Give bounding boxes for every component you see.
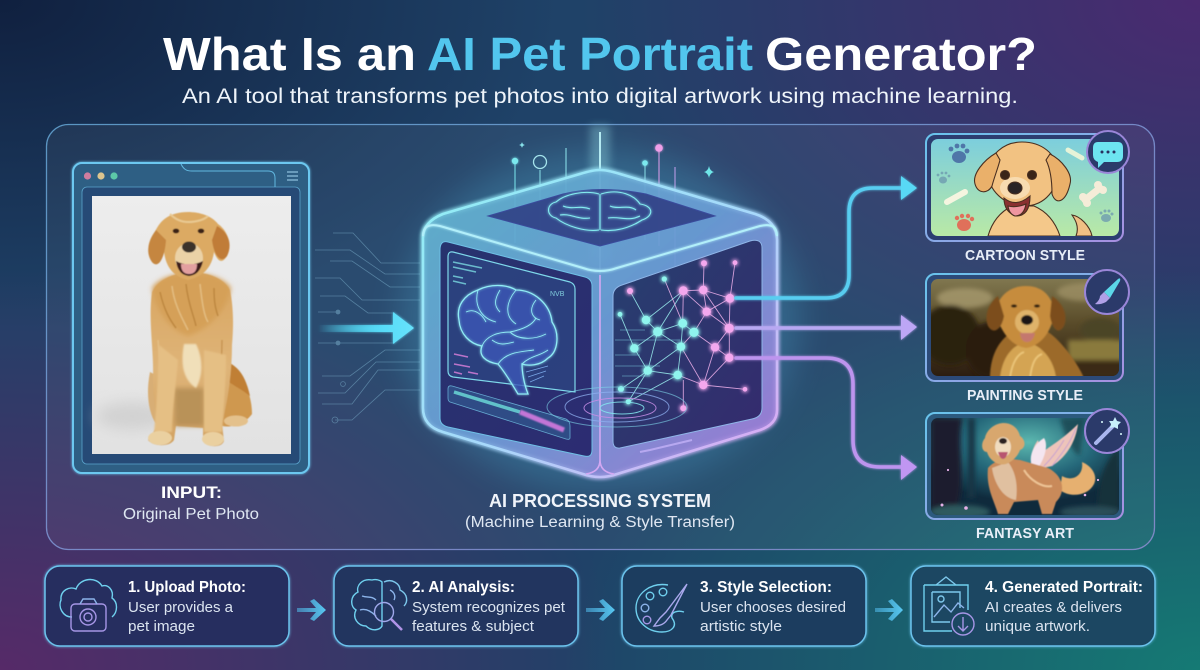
body — [988, 459, 1062, 514]
icon: window dots — [84, 172, 118, 180]
step 2: AI analysis: 2. AI Analysis: — [412, 579, 515, 596]
painted dog — [986, 286, 1084, 378]
icon: AI processing cube — [400, 125, 800, 490]
label: AI processing system: (Machine Learning & Style Transfer) — [465, 514, 735, 531]
icon badge: magic wand — [1085, 409, 1129, 453]
original dog photo — [92, 196, 291, 454]
step 3: style selection — [622, 566, 866, 646]
top face with brain — [488, 190, 715, 246]
step 4: generated portrait — [911, 566, 1155, 646]
step 2: AI analysis — [334, 566, 578, 646]
label: painting style: PAINTING STYLE — [967, 388, 1083, 404]
label: input — [123, 483, 259, 523]
subtitle: An AI tool that transforms pet photos into digital artwork using machine learning. — [182, 85, 1018, 108]
step 1: upload photo — [45, 566, 289, 646]
tail — [1060, 462, 1095, 495]
step 3: style selection: User chooses desired — [700, 600, 846, 616]
brain side view — [458, 286, 557, 394]
card: painting style — [920, 274, 1123, 381]
icon: cloud camera — [60, 580, 116, 631]
front legs — [154, 345, 178, 432]
title: AI Pet Portrait — [427, 28, 753, 80]
step 4: generated portrait: AI creates & delivers — [985, 600, 1122, 616]
step 1: upload photo: 1. Upload Photo: — [128, 579, 246, 596]
step 1: upload photo: pet image — [128, 619, 195, 635]
arrow: to cartoon style — [736, 176, 917, 298]
label: AI processing system: AI PROCESSING SYSTEM — [489, 491, 711, 511]
neural network — [615, 260, 747, 411]
icon: framed picture with download — [924, 577, 974, 635]
circuit lines — [315, 233, 420, 423]
chest ruff — [152, 273, 231, 336]
icon: palette and brush — [636, 584, 687, 632]
step 3: style selection: 3. Style Selection: — [700, 579, 832, 596]
step 4: generated portrait: 4. Generated Portrait: — [985, 579, 1143, 596]
label: input: Original Pet Photo — [123, 506, 259, 523]
title: What Is an — [163, 28, 416, 80]
holographic swirl — [547, 387, 687, 427]
step 4: generated portrait: unique artwork. — [985, 619, 1090, 635]
rear haunch — [205, 362, 252, 426]
progress bar — [448, 386, 570, 439]
fantasy dog with wings — [982, 423, 1095, 514]
icon badge: paint brush — [1085, 270, 1129, 314]
left screen — [440, 242, 592, 456]
top signal lines — [512, 132, 714, 300]
title: Generator? — [765, 28, 1037, 80]
cartoon dog — [975, 142, 1092, 236]
arrow: step 3 to 4 — [875, 599, 903, 621]
icon: brain with magnifier — [352, 580, 407, 630]
card: fantasy art — [926, 413, 1123, 519]
head — [982, 423, 1024, 464]
label: cartoon style: CARTOON STYLE — [965, 248, 1085, 264]
body — [148, 272, 233, 446]
step 2: AI analysis: System recognizes pet — [412, 600, 565, 616]
step 2: AI analysis: features & subject — [412, 619, 534, 635]
wing — [1031, 424, 1078, 470]
left screen: NVB — [550, 291, 565, 298]
arrow: input to AI system — [318, 312, 414, 344]
icon badge: chat bubble — [1087, 131, 1129, 173]
arrow: to fantasy art — [736, 358, 917, 480]
label: fantasy art: FANTASY ART — [976, 526, 1074, 542]
panel: input browser window — [73, 163, 309, 473]
step 3: style selection: artistic style — [700, 619, 782, 635]
arrow: to painting style — [736, 315, 917, 340]
cube body — [423, 170, 777, 477]
step 1: upload photo: User provides a — [128, 600, 234, 616]
label: input: INPUT: — [161, 483, 222, 502]
arrow: step 2 to 3 — [586, 599, 615, 621]
paw prints and bones — [937, 144, 1114, 231]
label: AI processing system — [465, 491, 735, 531]
icon: menu — [287, 172, 298, 180]
card: cartoon style — [926, 134, 1123, 241]
head — [148, 212, 229, 280]
chest highlight — [182, 344, 201, 388]
arrow: step 1 to 2 — [297, 599, 326, 621]
title — [163, 28, 1037, 80]
panel: main workflow — [46, 124, 1154, 550]
right screen — [613, 240, 762, 452]
shaded gap between legs — [174, 388, 204, 426]
